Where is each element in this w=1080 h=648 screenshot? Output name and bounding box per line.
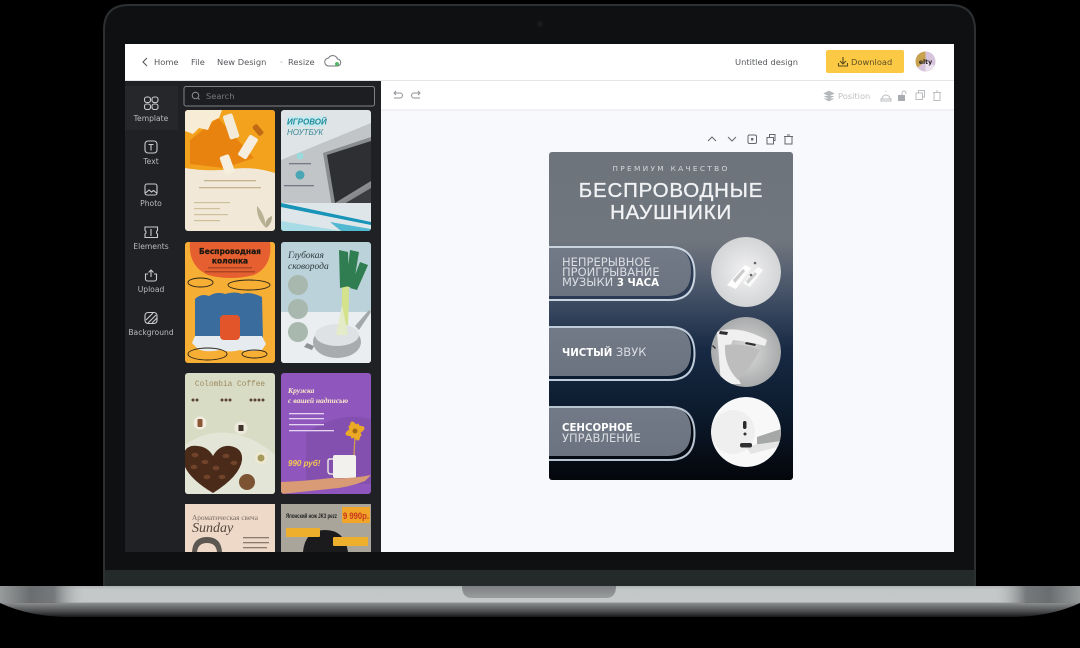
icon: upload	[146, 270, 156, 281]
avatar	[916, 52, 936, 72]
icon: back chevron	[143, 58, 147, 66]
feature pill 1: НЕПРЕРЫВНОЕ	[562, 255, 651, 269]
feature photo 3	[711, 397, 781, 467]
template card: colombia coffee: Colombia Coffee	[195, 381, 265, 389]
icon: redo	[412, 91, 420, 98]
icon: photo	[145, 184, 157, 195]
template card: frying pan	[281, 242, 371, 363]
template card: mug	[281, 373, 371, 494]
icon: cloud saved	[325, 56, 341, 66]
sidebar: Text	[142, 157, 159, 166]
menu items: Resize	[288, 57, 315, 67]
icon: undo	[394, 91, 402, 98]
template card: cosmetics	[185, 110, 275, 231]
download button	[826, 50, 904, 73]
menu items	[154, 57, 798, 67]
poster title	[579, 179, 763, 224]
poster	[549, 152, 793, 480]
template card: speaker: Беспроводная	[199, 247, 261, 256]
search box: Search	[206, 91, 235, 101]
template card: mug: 990 руб!	[288, 459, 321, 468]
template card: colombia coffee	[183, 373, 275, 494]
icon: background	[145, 312, 157, 324]
feature photo 1	[711, 237, 781, 307]
template card: japanese knife: 9 990р.	[343, 511, 369, 522]
icon: trash	[933, 91, 941, 100]
icon: cloud status dot	[335, 62, 339, 66]
sidebar: Upload	[138, 285, 164, 294]
icon: elements	[145, 227, 158, 238]
laptop lid	[103, 4, 976, 586]
feature pill 1	[549, 247, 694, 300]
toolbar: Position	[838, 91, 870, 101]
sidebar: Elements	[133, 242, 169, 251]
template card: gaming laptop: НОУТБУК	[287, 128, 324, 137]
feature pill 1: ПРОИГРЫВАНИЕ	[562, 265, 660, 279]
panel collapse handle	[381, 323, 387, 365]
webcam	[537, 21, 543, 27]
menu items: Untitled design	[735, 57, 798, 67]
template card: speaker: колонка	[212, 256, 248, 266]
template card: frying pan: Глубокая	[287, 250, 324, 261]
template card: gaming laptop: ИГРОВОЙ	[287, 118, 327, 126]
menu items: New Design	[217, 57, 266, 67]
template card: japanese knife: Японский нож JK3 pezz	[286, 512, 338, 520]
avatar: elty	[919, 59, 932, 66]
top bar	[125, 44, 954, 80]
feature pill 2: ЧИСТЫЙ ЗВУК	[562, 345, 646, 359]
menu items: File	[191, 57, 205, 67]
search box	[184, 86, 374, 106]
poster title: НАУШНИКИ	[610, 201, 732, 224]
laptop base	[0, 586, 1080, 617]
poster title: БЕСПРОВОДНЫЕ	[579, 179, 763, 202]
template card: gaming laptop	[281, 110, 371, 231]
trackpad notch	[462, 586, 616, 598]
icon: text	[145, 141, 157, 153]
feature pill 2	[549, 327, 694, 380]
template card: speaker	[185, 242, 275, 363]
icon: style	[881, 91, 891, 101]
template card: candle	[185, 504, 275, 552]
left panel	[125, 81, 387, 552]
feature pill 3	[549, 407, 694, 460]
download button: Download	[851, 57, 892, 67]
screen: design editor	[125, 44, 954, 552]
icon: template	[144, 97, 158, 110]
icon: copy	[916, 90, 924, 100]
feature pill 3: СЕНСОРНОЕ	[562, 423, 633, 434]
canvas area	[381, 90, 954, 480]
sidebar: Photo	[140, 199, 162, 208]
template card: mug: с вашей надписью	[288, 396, 349, 405]
feature photo 2	[711, 317, 781, 387]
template card: candle: Sunday	[192, 521, 234, 536]
toolbar	[381, 81, 954, 110]
poster kicker: ПРЕМИУМ КАЧЕСТВО	[612, 164, 730, 173]
feature pill 1: МУЗЫКИ 3 ЧАСА	[562, 275, 659, 289]
menu items: Home	[154, 57, 179, 67]
feature pill 3: УПРАВЛЕНИЕ	[562, 431, 641, 445]
element controls	[708, 134, 793, 144]
template card: mug: Кружка	[287, 386, 315, 395]
template card: japanese knife	[281, 504, 371, 552]
icon: layers	[824, 91, 834, 101]
sidebar: Background	[128, 328, 174, 337]
icon: lock	[898, 95, 905, 101]
template card: candle: Ароматическая свеча	[192, 513, 259, 522]
sidebar	[125, 86, 178, 337]
template card: frying pan: сковорода	[288, 261, 329, 272]
sidebar: Template	[133, 114, 169, 123]
